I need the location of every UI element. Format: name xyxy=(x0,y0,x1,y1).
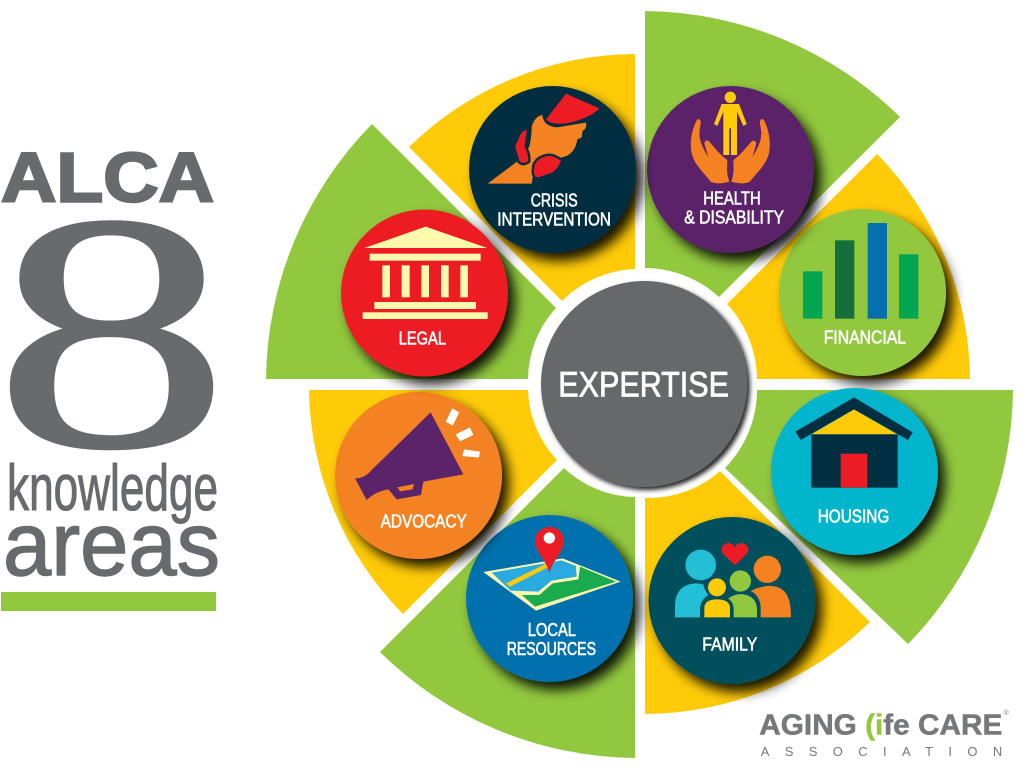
segment: green lower right xyxy=(725,390,1013,644)
label: health and disability: & DISABILITY xyxy=(684,207,784,227)
circle: advocacy xyxy=(335,392,502,559)
title: ALCA 8 knowledge areas xyxy=(0,138,230,611)
label: expertise: EXPERTISE xyxy=(558,366,729,404)
label: crisis intervention: INTERVENTION xyxy=(497,210,611,230)
label: local resources xyxy=(507,620,596,659)
icon: map with location pin xyxy=(483,527,621,611)
label: family: FAMILY xyxy=(702,635,757,655)
label: local resources: RESOURCES xyxy=(507,639,596,659)
segment: green top right xyxy=(645,11,900,297)
segment: yellow lower left xyxy=(309,390,557,614)
circle: housing xyxy=(771,388,938,555)
label: advocacy: ADVOCACY xyxy=(381,511,467,531)
wheel segments xyxy=(266,11,1013,758)
icon: person in caring hands xyxy=(691,92,770,183)
label: housing: HOUSING xyxy=(818,506,889,526)
circle: local resources xyxy=(466,515,633,682)
circle: financial xyxy=(779,209,946,376)
center circle: expertise xyxy=(541,281,747,487)
segment: green bottom left xyxy=(380,468,635,758)
registered mark: ® xyxy=(1004,709,1010,717)
segment: yellow right xyxy=(727,154,970,379)
circle: legal xyxy=(341,210,508,376)
icon: house xyxy=(795,397,913,488)
logo: Aging Life Care Association xyxy=(759,709,1010,759)
text: knowledge: knowledge xyxy=(7,451,218,524)
logo subline: ASSOCIATION xyxy=(761,744,1002,759)
green underline bar xyxy=(1,592,216,611)
circle: health and disability xyxy=(647,86,814,253)
icon: helping hands xyxy=(488,94,599,184)
segment: green upper left xyxy=(266,124,556,379)
heading: ALCA: ALCA xyxy=(1,138,214,216)
icon: courthouse xyxy=(363,227,488,319)
circle: crisis intervention xyxy=(469,86,636,253)
label: crisis intervention: CRISIS xyxy=(531,191,578,211)
numeral 8: 8 xyxy=(0,145,230,519)
icon: megaphone xyxy=(355,408,480,500)
icon: bar chart xyxy=(803,223,918,319)
label: local resources: LOCAL xyxy=(528,620,576,640)
label: crisis intervention xyxy=(497,191,611,230)
label: health and disability: HEALTH xyxy=(703,188,761,208)
logo wordmark: AGING (ife CARE xyxy=(759,709,1002,741)
text: areas: areas xyxy=(3,495,220,595)
segment: yellow top left xyxy=(409,54,635,301)
segment: yellow bottom right xyxy=(645,471,870,714)
label: financial: FINANCIAL xyxy=(824,327,906,347)
label: health and disability xyxy=(684,188,784,227)
circle: family xyxy=(648,517,816,684)
icon: family with heart xyxy=(675,543,791,617)
label: legal: LEGAL xyxy=(399,328,446,348)
